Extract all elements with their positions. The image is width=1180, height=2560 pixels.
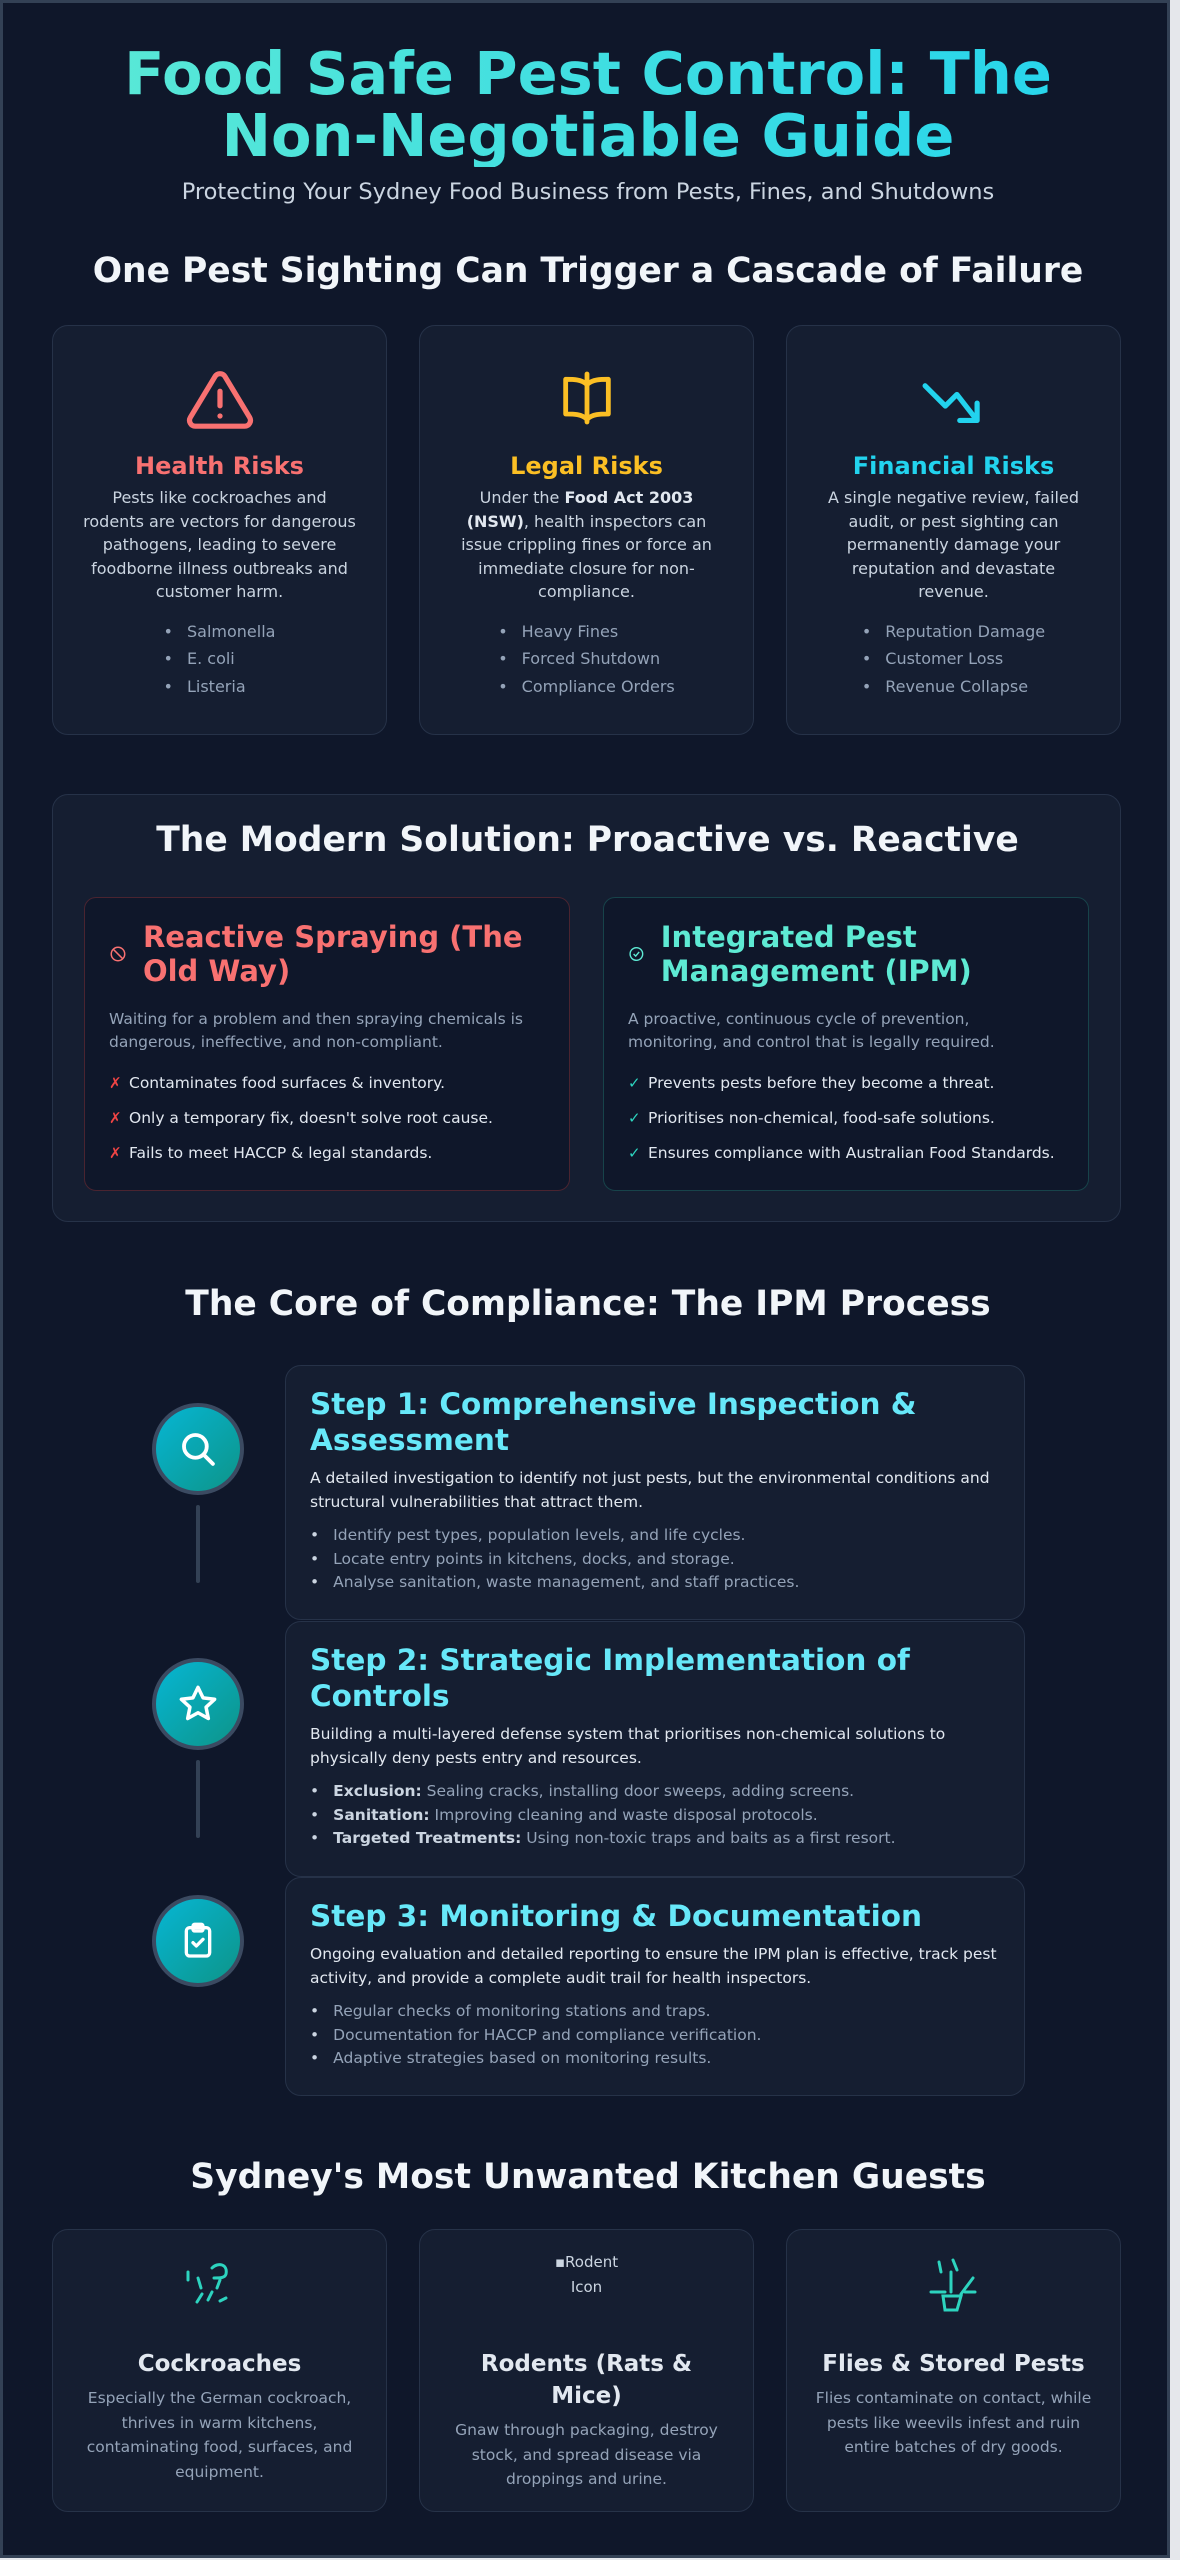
box: reactive spraying <box>84 897 570 1191</box>
box: IPM: A proactive, continuous cycle of prevention, <box>628 1010 969 1028</box>
panel: flies: Flies & Stored Pests <box>822 2351 1085 2377</box>
box: IPM: Prevents pests before they become a threat. <box>648 1074 994 1092</box>
step 2: Step 2: Strategic Implementation of Controls <box>310 1643 910 1713</box>
title: Food Safe Pest Control: The <box>124 39 1052 108</box>
step 3 <box>285 1877 1025 2096</box>
title: Non-Negotiable Guide <box>222 101 954 170</box>
panel: legal risks: immediate closure for non-compliance. <box>478 558 695 601</box>
panel: financial risks: permanently damage your <box>847 535 1060 554</box>
panel: financial risks: revenue. <box>918 582 989 601</box>
icon: book <box>563 372 611 424</box>
panel: legal risks: (NSW), health inspectors can <box>467 512 706 530</box>
panel: legal risks: Forced Shutdown <box>522 649 660 668</box>
heading: IPM process: The Core of Compliance: The IPM Process <box>185 1284 991 1324</box>
box: IPM: Integrated Pest Management (IPM) <box>661 920 972 988</box>
box: reactive spraying: Contaminates food surfaces & inventory. <box>129 1074 445 1092</box>
icon: rodent placeholder: ▪Rodent <box>555 2253 618 2271</box>
box: reactive spraying: ✗ <box>109 1144 122 1162</box>
icon: fly <box>930 2258 976 2312</box>
step 3: Step 3: Monitoring & Documentation <box>310 1899 922 1933</box>
box: reactive spraying: Fails to meet HACCP & legal standards. <box>129 1144 432 1162</box>
step 3: Regular checks of monitoring stations and traps. <box>333 2002 711 2020</box>
icon: rodent placeholder: Icon <box>571 2278 602 2296</box>
panel: financial risks: A single negative review, failed <box>828 488 1079 507</box>
panel: health risks: Listeria <box>187 676 246 696</box>
step 2: Sanitation: Improving cleaning and waste disposal protocols. <box>333 1806 818 1824</box>
heading: cascade of failure: One Pest Sighting Can Trigger a Cascade of Failure <box>93 251 1083 291</box>
panel: cockroaches: Especially the German cockroach, thrives in warm kitchens, contaminating food, surfaces, and equipment. <box>87 2389 352 2480</box>
icon: warning <box>186 371 254 429</box>
box: reactive spraying: Waiting for a problem and then spraying chemicals is dangerous, ineffective, and non-compliant. <box>109 1010 523 1051</box>
step 2: Targeted Treatments: Using non-toxic traps and baits as a first resort. <box>333 1829 896 1847</box>
icon: trend down <box>922 383 980 423</box>
panel: financial risks: audit, or pest sighting can <box>848 512 1059 530</box>
panel: legal risks: Heavy Fines <box>522 622 618 640</box>
panel: legal risks <box>419 325 754 735</box>
panel: flies: Flies contaminate on contact, while pests like weevils infest and ruin entire batches of dry goods. <box>816 2389 1091 2456</box>
heading: modern solution: The Modern Solution: Proactive vs. Reactive <box>156 820 1019 860</box>
panel: health risks: Salmonella <box>187 622 275 640</box>
panel: health risks: E. coli <box>187 649 235 668</box>
subtitle: Protecting Your Sydney Food Business from Pests, Fines, and Shutdowns <box>182 179 994 205</box>
step 3: Ongoing evaluation and detailed reporting to ensure the IPM plan is effective, track pest activity, and provide a complete audit trail for health inspectors. <box>310 1945 997 1987</box>
panel: health risks: Pests like cockroaches and <box>112 488 327 507</box>
icon: rodent placeholder <box>555 2253 618 2296</box>
panel: financial risks: Revenue Collapse <box>885 676 1028 696</box>
box: reactive spraying: Only a temporary fix, doesn't solve root cause. <box>129 1109 493 1127</box>
box: IPM: ✓ <box>628 1074 641 1092</box>
step 3: Adaptive strategies based on monitoring results. <box>333 2049 711 2067</box>
box: IPM: monitoring, and control that is legally required. <box>628 1033 995 1051</box>
step 1: A detailed investigation to identify not just pests, but the environmental conditions and structural vulnerabilities that attract them. <box>310 1469 990 1511</box>
panel: rodents <box>419 2229 754 2512</box>
heading: unwanted guests: Sydney's Most Unwanted Kitchen Guests <box>190 2157 986 2197</box>
icon: step 2 star <box>152 1658 244 1750</box>
panel: rodents: Rodents (Rats & <box>481 2351 692 2377</box>
panel: legal risks: Under the Food Act 2003 <box>480 488 693 507</box>
icon: cockroach <box>186 2263 228 2304</box>
panel: financial risks: Customer Loss <box>885 649 1003 668</box>
box: IPM: Ensures compliance with Australian Food Standards. <box>648 1144 1055 1162</box>
step 1: Analyse sanitation, waste management, and staff practices. <box>333 1573 799 1591</box>
panel: financial risks: Reputation Damage <box>885 622 1045 640</box>
icon: step 3 clipboard <box>152 1895 244 1987</box>
box: IPM: ✓ <box>628 1144 641 1162</box>
panel: legal risks: Legal Risks <box>510 452 663 480</box>
step 1: Locate entry points in kitchens, docks, and storage. <box>333 1550 735 1568</box>
panel: health risks <box>52 325 387 735</box>
box: reactive spraying: ✗ <box>109 1109 122 1127</box>
box: reactive spraying: Reactive Spraying (The Old Way) <box>143 920 523 988</box>
panel: cockroaches <box>52 2229 387 2512</box>
step 1 <box>285 1365 1025 1620</box>
panel: legal risks: Compliance Orders <box>522 676 675 696</box>
panel: financial risks: Financial Risks <box>853 452 1054 480</box>
panel: health risks: Health Risks <box>135 452 304 480</box>
box: IPM <box>603 897 1089 1191</box>
step 3: Documentation for HACCP and compliance verification. <box>333 2026 761 2044</box>
step 1: Step 1: Comprehensive Inspection & Assessment <box>310 1387 916 1457</box>
panel: flies <box>786 2229 1121 2512</box>
title <box>3 43 1173 167</box>
step 2 <box>285 1621 1025 1877</box>
panel: health risks: rodents are vectors for dangerous pathogens, leading to severe foodborne illness outbreaks and customer harm. <box>83 512 356 601</box>
panel: cockroaches: Cockroaches <box>138 2351 301 2377</box>
panel: legal risks: issue crippling fines or force an <box>461 535 712 554</box>
box: reactive spraying: ✗ <box>109 1074 122 1092</box>
icon: step 1 magnifier <box>152 1403 244 1495</box>
step 2: Building a multi-layered defense system that prioritises non-chemical solutions to physically deny pests entry and resources. <box>310 1725 945 1767</box>
panel: financial risks <box>786 325 1121 735</box>
panel: modern solution <box>52 794 1121 1222</box>
panel: financial risks: reputation and devastate <box>852 558 1055 578</box>
step 2: Exclusion: Sealing cracks, installing door sweeps, adding screens. <box>333 1782 854 1800</box>
panel: rodents: Gnaw through packaging, destroy stock, and spread disease via droppings and urine. <box>455 2421 718 2488</box>
step 1: Identify pest types, population levels, and life cycles. <box>333 1526 745 1544</box>
panel: rodents: Mice) <box>551 2383 622 2409</box>
box: IPM: ✓ <box>628 1109 641 1127</box>
box: IPM: Prioritises non-chemical, food-safe solutions. <box>648 1109 995 1127</box>
